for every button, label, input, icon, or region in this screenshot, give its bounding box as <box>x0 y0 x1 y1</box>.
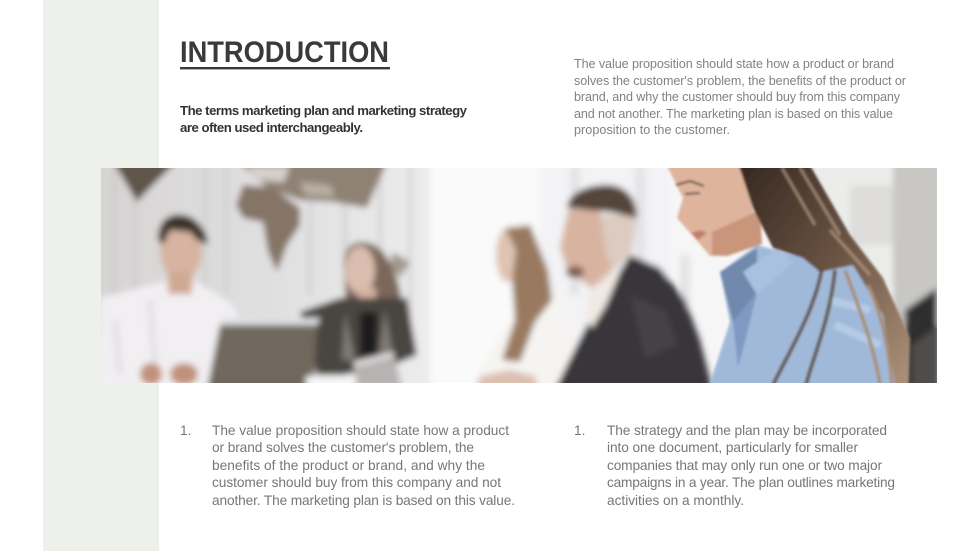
laptop <box>206 318 320 395</box>
list item: strategy and plan: companies that may only run one or two major <box>607 458 882 473</box>
text block: value proposition: solves the customer's problem, the benefits of the product or <box>574 74 906 88</box>
subheading: are often used interchangeably. <box>180 120 363 135</box>
man in dark suit <box>552 185 714 395</box>
subheading <box>180 103 468 135</box>
list item: value proposition: The value proposition should state how a product <box>212 423 509 438</box>
man on the left <box>96 215 240 395</box>
list item: strategy and plan: The strategy and the plan may be incorporated <box>607 423 887 438</box>
list item: value proposition <box>180 423 515 508</box>
list item: strategy and plan: into one document, particularly for smaller <box>607 440 858 455</box>
text block: value proposition: proposition to the customer. <box>574 123 730 137</box>
list item: value proposition: another. The marketing plan is based on this value. <box>212 493 515 508</box>
list item: value proposition: benefits of the product or brand, and why the <box>212 458 485 473</box>
list item: strategy and plan: 1. <box>574 423 585 438</box>
list item: value proposition: 1. <box>180 423 191 438</box>
text block: value proposition <box>574 57 906 137</box>
text block: value proposition: The value proposition should state how a product or brand <box>574 57 894 71</box>
text block: value proposition: brand, and why the customer should buy from this company <box>574 90 901 104</box>
panel: sidebar band <box>43 0 159 551</box>
woman in blue shirt <box>664 160 910 395</box>
list item: strategy and plan <box>574 423 895 508</box>
woman in dark jacket <box>300 242 417 375</box>
chair <box>905 288 937 395</box>
list item: strategy and plan: campaigns in a year. The plan outlines marketing <box>607 475 895 490</box>
list item: value proposition: customer should buy from this company and not <box>212 475 501 490</box>
text block: value proposition: and not another. The marketing plan is based on this value <box>574 107 893 121</box>
list item: strategy and plan: activities on a monthly. <box>607 493 744 508</box>
table and tablet <box>300 348 404 383</box>
list item: value proposition: or brand solves the customer's problem, the <box>212 440 474 455</box>
photo: business team meeting <box>101 168 937 383</box>
title: INTRODUCTION <box>180 36 389 69</box>
world map <box>112 160 410 278</box>
blonde woman <box>474 222 556 383</box>
subheading: The terms marketing plan and marketing strategy <box>180 103 468 118</box>
